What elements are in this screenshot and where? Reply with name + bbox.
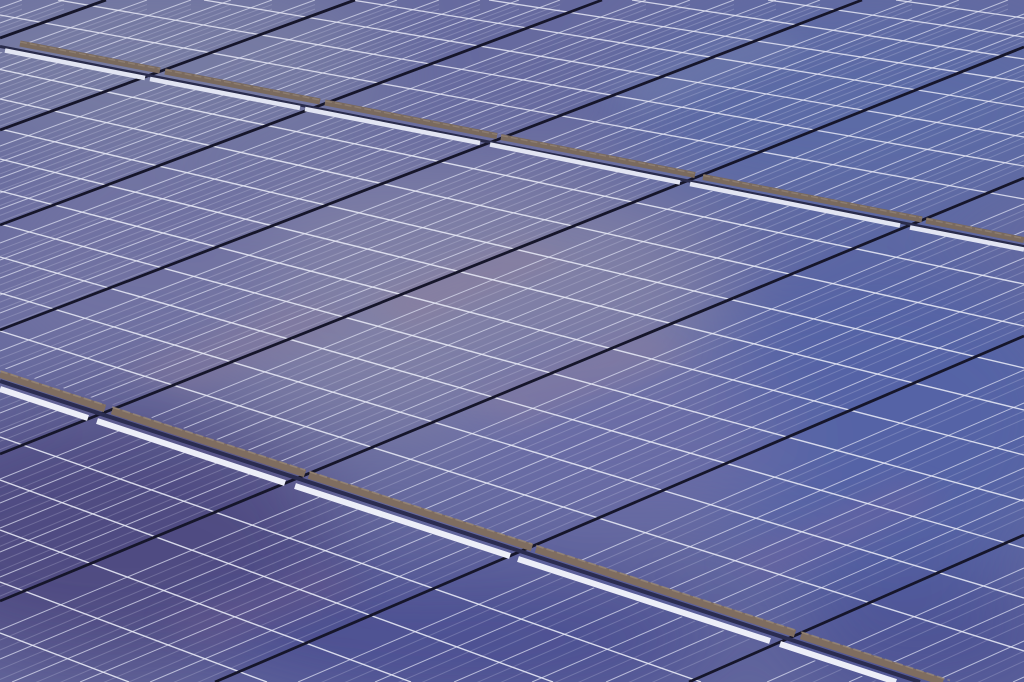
lower frame rail — [0, 371, 950, 682]
brown rail highlight — [0, 371, 950, 680]
upper frame rail — [0, 42, 1024, 250]
white frame edges: lower rail — [0, 389, 896, 682]
brown frame edges: upper rail — [20, 44, 1024, 240]
brown rail texture: upper rail — [20, 42, 1024, 238]
brown frame edges: lower rail — [0, 374, 943, 682]
white cell lines: lower row — [0, 392, 876, 682]
white cell lines: top row — [0, 0, 1024, 235]
white frame edges: upper rail — [5, 50, 1024, 250]
